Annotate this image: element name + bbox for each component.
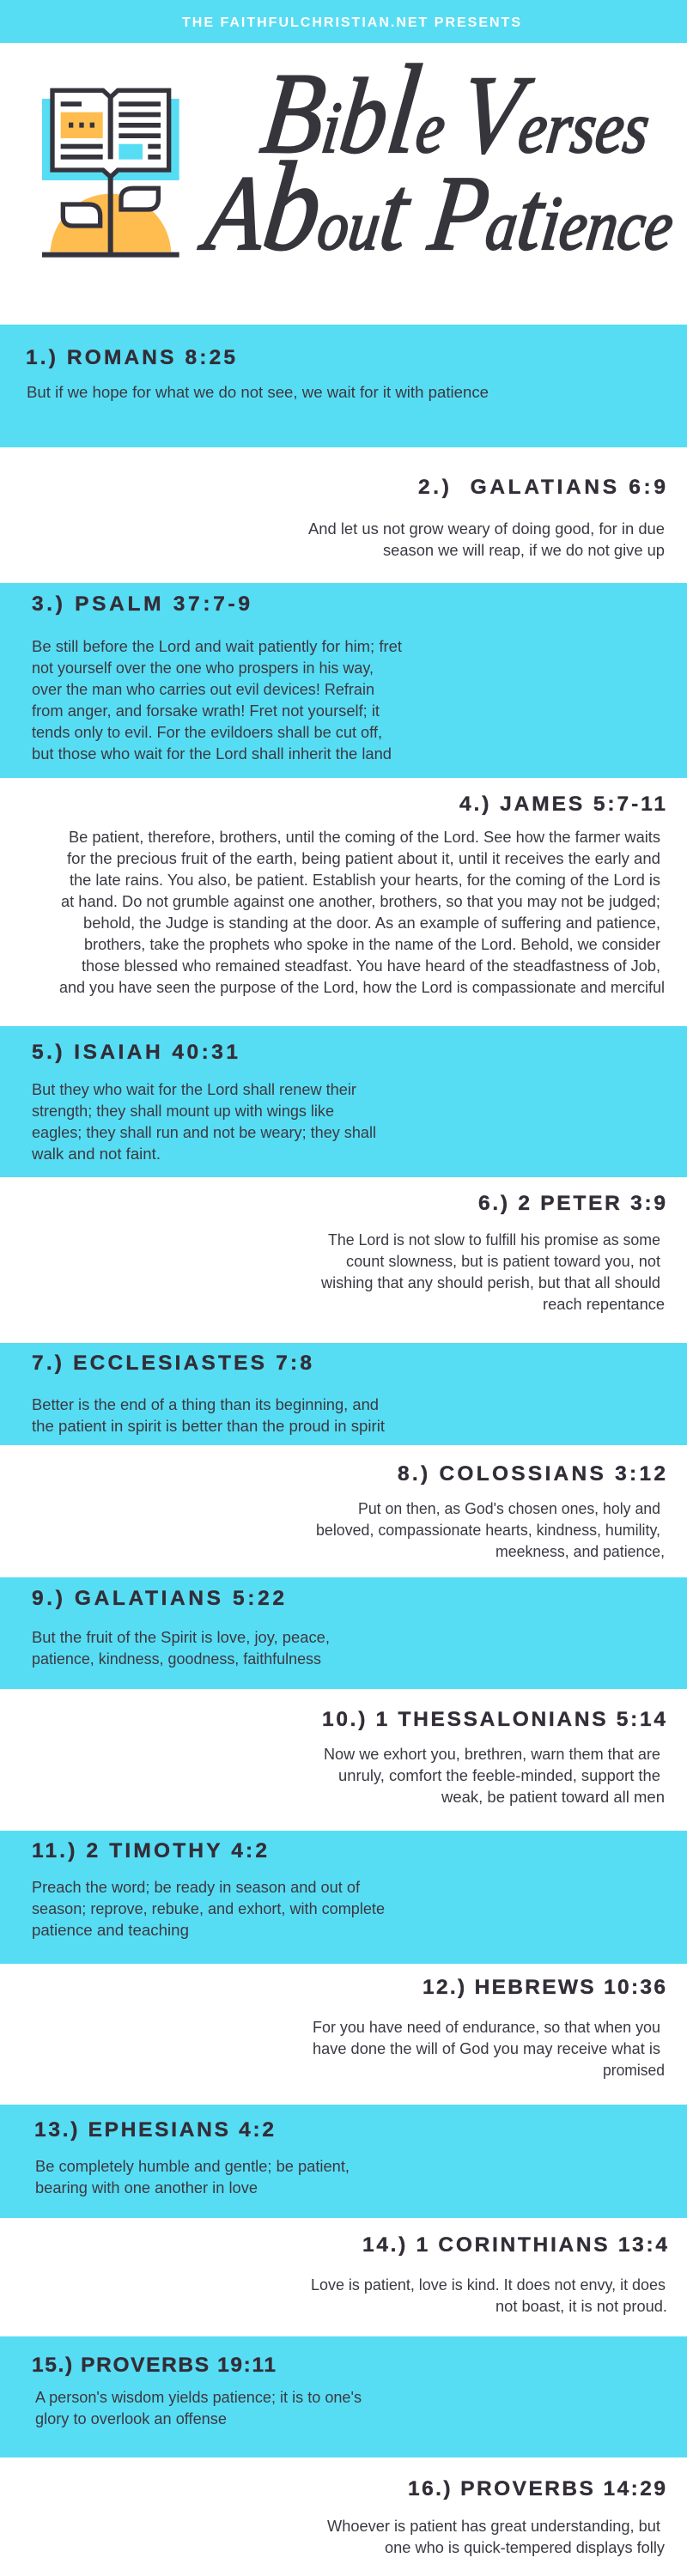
- verse text: [320, 1231, 665, 1313]
- verse text: for the precious fruit of the earth, being patient about it, until it receives the early and: [67, 850, 660, 867]
- heading: 3.) PSALM 37:7-9: [32, 592, 250, 616]
- title: [194, 39, 684, 277]
- verse text: reach repentance: [543, 1296, 665, 1313]
- verse text: tends only to evil. For the evildoers shall be cut off,: [32, 724, 382, 741]
- verse text: not boast, it is not proud.: [495, 2298, 667, 2315]
- verse text: eagles; they shall run and not be weary; they shall: [32, 1124, 376, 1141]
- verse text: count slowness, but is patient toward you, not: [346, 1253, 660, 1270]
- verse text: unruly, comfort the feeble-minded, support the: [338, 1767, 660, 1784]
- verse text: beloved, compassionate hearts, kindness, humility,: [316, 1522, 660, 1539]
- verse text: [32, 1396, 385, 1435]
- verse text: [32, 1879, 385, 1939]
- panel: verse 4 James: [0, 778, 687, 1026]
- verse text: but those who wait for the Lord shall inherit the land: [32, 745, 392, 762]
- verse text: Preach the word; be ready in season and out of: [32, 1879, 361, 1896]
- verse text: [308, 520, 665, 559]
- verse text: Love is patient, love is kind. It does not envy, it does: [311, 2276, 666, 2293]
- panel: verse 16 Proverbs: [0, 2458, 687, 2576]
- verse text: season; reprove, rebuke, and exhort, with complete: [32, 1900, 385, 1917]
- verse text: wishing that any should perish, but that all should: [320, 1274, 660, 1291]
- verse text: at hand. Do not grumble against one another, brothers, so that you may not be judged;: [61, 893, 660, 910]
- heading: 15.) PROVERBS 19:11: [32, 2354, 276, 2377]
- verse text: [32, 638, 402, 762]
- heading: 7.) ECCLESIASTES 7:8: [32, 1352, 312, 1375]
- verse text: one who is quick-tempered displays folly: [385, 2539, 665, 2556]
- verse text: Whoever is patient has great understanding, but: [327, 2518, 660, 2535]
- verse text: weak, be patient toward all men: [441, 1789, 665, 1806]
- heading: 16.) PROVERBS 14:29: [408, 2477, 666, 2500]
- verse text: And let us not grow weary of doing good, for in due: [308, 520, 665, 538]
- verse text: Now we exhort you, brethren, warn them that are: [324, 1746, 660, 1763]
- verse text: meekness, and patience,: [495, 1543, 665, 1560]
- verse text: have done the will of God you may receive what is: [313, 2040, 660, 2057]
- verse text: not yourself over the one who prospers in his way,: [32, 659, 374, 677]
- verse text: [35, 2389, 362, 2427]
- panel: verse 6 2 Peter: [0, 1177, 687, 1343]
- icon: open book on a plant: [42, 90, 179, 258]
- heading: 9.) GALATIANS 5:22: [32, 1587, 284, 1610]
- verse text: Be patient, therefore, brothers, until the coming of the Lord. See how the farmer waits: [69, 829, 660, 846]
- panel: verse 13 Ephesians: [0, 2105, 687, 2218]
- verse text: [311, 2276, 667, 2315]
- verse text: [324, 1746, 665, 1806]
- verse text: [327, 2518, 665, 2556]
- heading: 10.) 1 THESSALONIANS 5:14: [322, 1708, 666, 1731]
- heading: 5.) ISAIAH 40:31: [32, 1041, 238, 1064]
- heading: 14.) 1 CORINTHIANS 13:4: [362, 2233, 667, 2257]
- verse text: For you have need of endurance, so that when you: [313, 2019, 660, 2036]
- verse text: Put on then, as God's chosen ones, holy and: [358, 1500, 660, 1517]
- top banner: THE FAITHFULCHRISTIAN.NET PRESENTS: [182, 15, 520, 30]
- panel: verse 8 Colossians: [0, 1445, 687, 1577]
- verse text: patience and teaching: [32, 1922, 189, 1939]
- panel: verse 14 1 Corinthians: [0, 2218, 687, 2336]
- verse text: and you have seen the purpose of the Lord, how the Lord is compassionate and merciful: [59, 979, 665, 996]
- panel: verse 10 1 Thessalonians: [0, 1689, 687, 1831]
- title: About Patience: [194, 137, 684, 277]
- panel: verse 9 Galatians: [0, 1577, 687, 1689]
- title: Bible Verses: [255, 39, 660, 180]
- verse text: But if we hope for what we do not see, we wait for it with patience: [27, 384, 489, 401]
- verse text: bearing with one another in love: [35, 2179, 258, 2196]
- heading: 6.) 2 PETER 3:9: [478, 1192, 666, 1215]
- verse text: season we will reap, if we do not give up: [383, 542, 665, 559]
- verse text: the patient in spirit is better than the proud in spirit: [32, 1418, 385, 1435]
- panel: verse 5 Isaiah: [0, 1026, 687, 1177]
- heading: 12.) HEBREWS 10:36: [423, 1976, 666, 1999]
- verse text: glory to overlook an offense: [35, 2410, 227, 2427]
- verse text: [35, 2158, 350, 2196]
- verse text: from anger, and forsake wrath! Fret not yourself; it: [32, 702, 380, 720]
- heading: 13.) EPHESIANS 4:2: [34, 2118, 274, 2142]
- top banner: [0, 0, 687, 43]
- verse text: strength; they shall mount up with wings like: [32, 1103, 334, 1120]
- verse text: Better is the end of a thing than its beginning, and: [32, 1396, 379, 1413]
- verse text: the late rains. You also, be patient. Establish your hearts, for the coming of the Lord is: [70, 872, 660, 889]
- panel: verse 11 2 Timothy: [0, 1831, 687, 1964]
- panel: verse 1 Romans: [0, 325, 687, 447]
- verse text: those blessed who remained steadfast. You have heard of the steadfastness of Job,: [82, 957, 660, 975]
- heading: 1.) ROMANS 8:25: [26, 346, 235, 369]
- verse text: A person's wisdom yields patience; it is to one's: [35, 2389, 362, 2406]
- verse text: But the fruit of the Spirit is love, joy, peace,: [32, 1629, 330, 1646]
- verse text: over the man who carries out evil devices! Refrain: [32, 681, 374, 698]
- panel: verse 7 Ecclesiastes: [0, 1343, 687, 1445]
- verse text: [316, 1500, 665, 1560]
- verse text: walk and not faint.: [31, 1145, 161, 1163]
- verse text: Be completely humble and gentle; be patient,: [35, 2158, 350, 2175]
- heading: 2.) GALATIANS 6:9: [418, 476, 666, 499]
- panel: verse 15 Proverbs: [0, 2336, 687, 2458]
- panel: verse 12 Hebrews: [0, 1964, 687, 2105]
- heading: 4.) JAMES 5:7-11: [459, 793, 666, 816]
- heading: 8.) COLOSSIANS 3:12: [398, 1462, 666, 1485]
- panel: title header: [0, 39, 687, 325]
- verse text: [31, 1081, 376, 1163]
- panel: verse 3 Psalm: [0, 583, 687, 778]
- verse text: The Lord is not slow to fulfill his promise as some: [328, 1231, 660, 1249]
- verse text: promised: [603, 2062, 665, 2079]
- verse text: [59, 829, 665, 996]
- verse text: But they who wait for the Lord shall renew their: [32, 1081, 356, 1098]
- verse text: brothers, take the prophets who spoke in the name of the Lord. Behold, we consider: [84, 936, 660, 953]
- heading: 11.) 2 TIMOTHY 4:2: [32, 1839, 267, 1862]
- panel: verse 2 Galatians: [0, 447, 687, 583]
- verse text: [32, 1629, 330, 1668]
- verse text: [313, 2019, 665, 2079]
- verse text: Be still before the Lord and wait patiently for him; fret: [32, 638, 402, 655]
- verse text: patience, kindness, goodness, faithfulness: [32, 1650, 321, 1668]
- verse text: behold, the Judge is standing at the door. As an example of suffering and patience,: [83, 914, 660, 932]
